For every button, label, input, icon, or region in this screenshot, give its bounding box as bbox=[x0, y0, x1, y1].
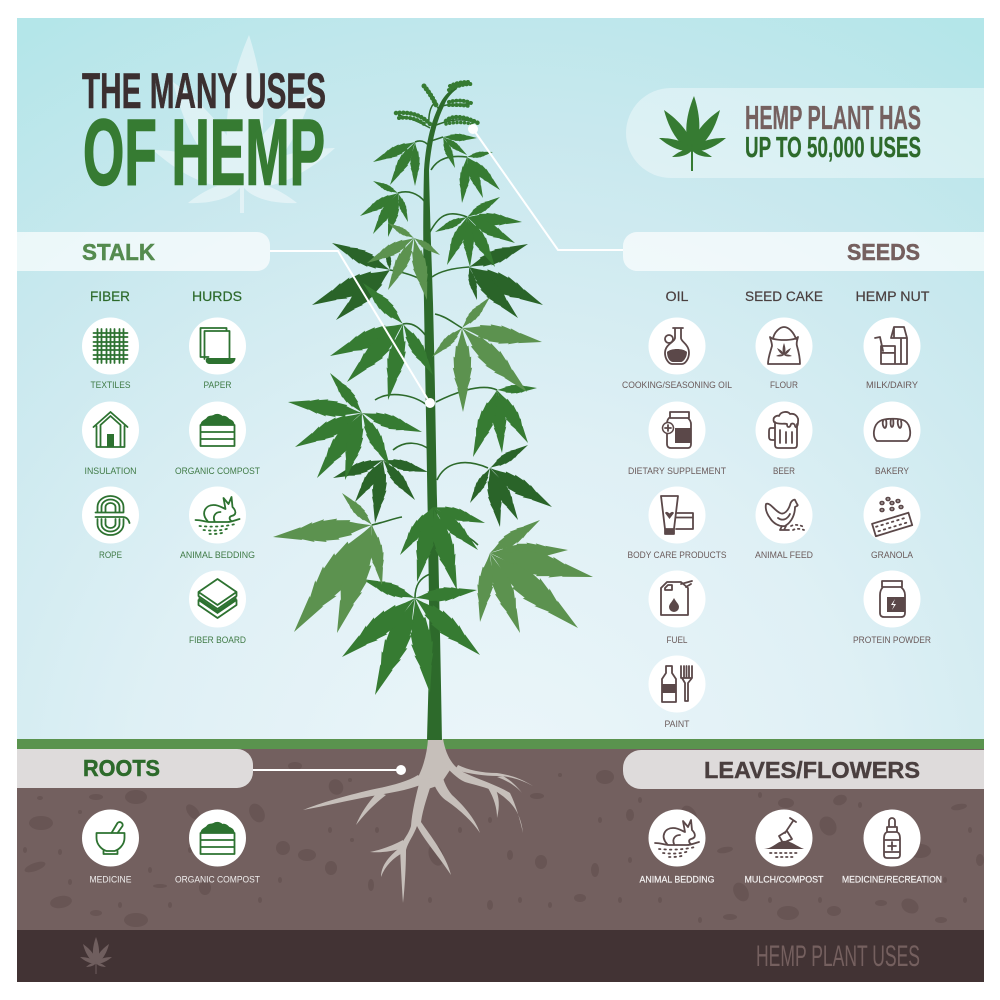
callout text bbox=[745, 99, 921, 164]
panel: leaves/flowers bbox=[623, 750, 984, 884]
item: body care products bbox=[628, 486, 726, 560]
title: THE MANY USES bbox=[82, 63, 326, 119]
mid green leaves bbox=[287, 133, 537, 700]
ground strip bbox=[17, 739, 984, 749]
subheading: hurds: HURDS bbox=[192, 288, 242, 304]
item: dietary supplement bbox=[628, 402, 726, 476]
soil bbox=[17, 749, 984, 930]
item: fuel bbox=[648, 570, 706, 645]
callout: hemp plant has up to 50,000 uses bbox=[626, 88, 984, 178]
item: fiber board bbox=[189, 570, 246, 645]
item: cooking oil bbox=[622, 318, 732, 390]
item: animal feed: ANIMAL FEED bbox=[755, 550, 813, 560]
item: fiber board: FIBER BOARD bbox=[189, 635, 246, 645]
item: beer: BEER bbox=[773, 466, 795, 476]
panel: roots bbox=[17, 749, 260, 884]
item: insulation: INSULATION bbox=[84, 466, 136, 476]
item: dietary supplement: DIETARY SUPPLEMENT bbox=[628, 466, 726, 476]
icon: footer hemp leaf bbox=[79, 937, 113, 974]
item: insulation bbox=[82, 402, 139, 476]
item: medicine bbox=[82, 810, 139, 884]
heading: roots: ROOTS bbox=[83, 755, 160, 781]
item: textiles: TEXTILES bbox=[90, 380, 130, 390]
item: animal feed bbox=[755, 486, 813, 560]
subheading: seed cake: SEED CAKE bbox=[745, 288, 823, 304]
heading: stalk: STALK bbox=[82, 239, 155, 265]
panel: stalk bbox=[17, 232, 270, 645]
subheading: hemp nut: HEMP NUT bbox=[856, 288, 930, 304]
item: paper bbox=[189, 318, 246, 390]
item: granola: GRANOLA bbox=[871, 550, 913, 560]
item: body care products: BODY CARE PRODUCTS bbox=[628, 550, 726, 560]
item: milk bbox=[864, 318, 920, 390]
item: protein powder: PROTEIN POWDER bbox=[853, 635, 931, 645]
roots bbox=[303, 739, 533, 903]
title bbox=[82, 63, 326, 204]
title: OF HEMP bbox=[83, 100, 325, 204]
light green leaves bbox=[272, 220, 596, 641]
connector lines bbox=[253, 129, 623, 770]
item: medicine/recreation bbox=[842, 810, 942, 884]
item: fuel: FUEL bbox=[666, 635, 688, 645]
item: medicine: MEDICINE bbox=[90, 874, 132, 884]
item: organic compost bbox=[175, 810, 260, 884]
flower buds bbox=[396, 82, 478, 128]
heading: leaves/flowers: LEAVES/FLOWERS bbox=[704, 757, 920, 783]
leaf stems bbox=[372, 137, 497, 598]
watermark hemp leaf bbox=[149, 34, 339, 213]
item: mulch/compost bbox=[744, 810, 824, 884]
item: medicine/recreation: MEDICINE/RECREATION bbox=[842, 874, 942, 884]
dark leaves bbox=[308, 236, 556, 528]
main stalk bbox=[423, 87, 457, 740]
item: rope: ROPE bbox=[99, 550, 122, 560]
bottom bar bbox=[17, 930, 984, 982]
item: beer bbox=[756, 402, 812, 476]
connector dots bbox=[396, 124, 478, 775]
item: animal bedding: ANIMAL BEDDING bbox=[640, 874, 714, 884]
heading: seeds: SEEDS bbox=[847, 239, 920, 265]
subheading: oil: OIL bbox=[666, 288, 689, 304]
item: rope bbox=[82, 486, 139, 560]
hemp plant bbox=[272, 82, 596, 740]
item: bakery bbox=[864, 402, 920, 476]
item: granola bbox=[864, 486, 920, 560]
item: organic compost: ORGANIC COMPOST bbox=[175, 874, 260, 884]
panel: seeds bbox=[622, 232, 984, 729]
item: paper: PAPER bbox=[204, 380, 232, 390]
item: cooking oil: COOKING/SEASONING OIL bbox=[622, 380, 732, 390]
item: flour bbox=[756, 318, 812, 390]
icon: hemp leaf bbox=[658, 96, 727, 171]
item: animal bedding bbox=[180, 486, 255, 560]
item: textiles bbox=[82, 318, 139, 390]
subheading: fiber: FIBER bbox=[90, 288, 130, 304]
item: paint bbox=[648, 656, 706, 729]
item: animal bedding: ANIMAL BEDDING bbox=[180, 550, 255, 560]
item: flour: FLOUR bbox=[770, 380, 798, 390]
item: protein powder bbox=[853, 570, 931, 645]
item: organic compost: ORGANIC COMPOST bbox=[175, 466, 260, 476]
item: organic compost bbox=[175, 402, 260, 476]
item: animal bedding bbox=[640, 810, 714, 884]
item: bakery: BAKERY bbox=[875, 466, 909, 476]
item: mulch/compost: MULCH/COMPOST bbox=[744, 874, 824, 884]
item: milk: MILK/DAIRY bbox=[866, 380, 918, 390]
item: paint: PAINT bbox=[664, 719, 690, 729]
